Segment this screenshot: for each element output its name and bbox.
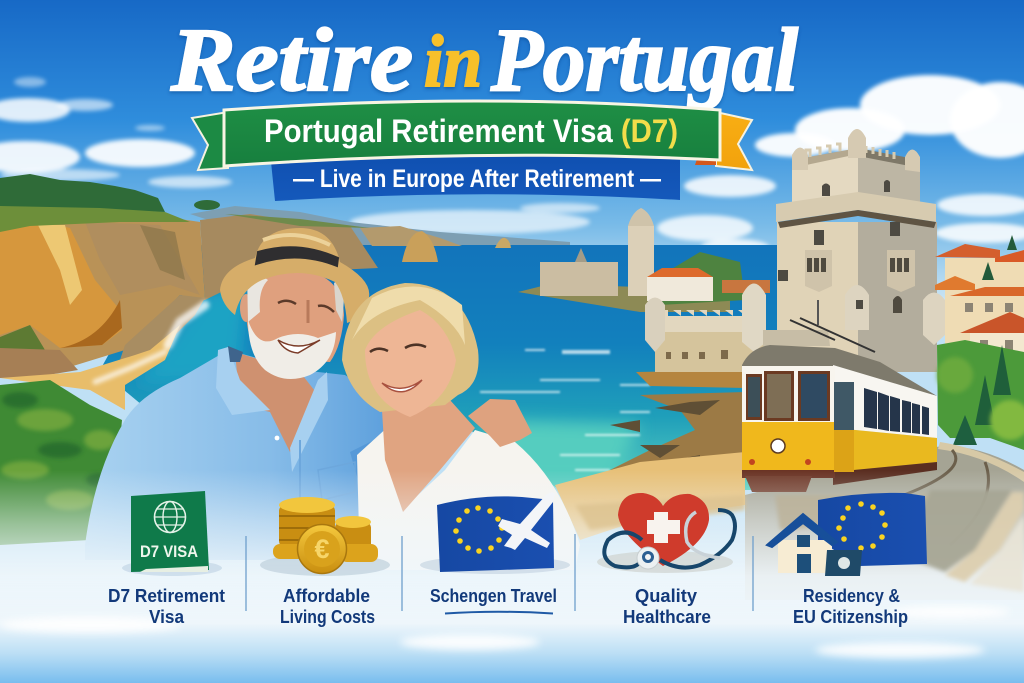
label: Affordable Living Costs: Living Costs [280,606,375,627]
distant hills [190,206,570,250]
icon: coins: € [314,534,330,564]
tram front [742,366,835,470]
tram [742,300,937,492]
tram side [833,365,937,438]
face [246,270,344,362]
title: in [424,21,482,103]
shirt [85,350,392,560]
ribbon tails [192,112,752,170]
chest [382,400,475,512]
upper tower [792,150,858,205]
label: D7 Retirement Visa: D7 Retirement [108,585,225,606]
tower windows and balconies [778,180,900,281]
hair [342,283,479,412]
sky background [0,0,1024,300]
label: Affordable Living Costs: Affordable [283,585,370,606]
Belem tower [645,129,945,372]
blouse [357,425,580,570]
collar [216,347,328,472]
white surf [95,305,205,382]
hat [220,228,369,323]
icon: passport [122,491,222,576]
label: Residency & EU Citizenship: Residency & [803,585,900,606]
icon: house and EU flag [767,493,927,576]
coastal rocks [610,370,745,470]
turquoise shallows [135,285,640,485]
label: Schengen Travel: Schengen Travel [430,585,557,606]
corner turrets [792,129,920,172]
label: Quality Healthcare: Quality [635,585,698,606]
label: Affordable Living Costs [280,585,375,627]
town on right [935,235,1024,358]
banner [192,101,752,201]
face [365,310,456,417]
beach [0,295,205,410]
icon: passport: D7 VISA [140,542,198,561]
icon: EU flag and plane [420,492,570,574]
near cliffs [0,205,205,378]
terrace and battlements [776,192,936,222]
labels [108,585,908,627]
title: Retire [170,11,413,110]
label: Quality Healthcare: Healthcare [623,606,711,627]
icon: coins [260,497,390,576]
banner heading: Portugal Retirement Visa (D7) [264,113,678,149]
man [85,228,392,560]
right trees [937,340,1024,450]
tower body [777,222,858,372]
bushes [0,380,122,545]
label: Residency & EU Citizenship: EU Citizenship [793,606,908,627]
label: D7 Retirement Visa [108,585,225,627]
neck [235,352,318,452]
bottom white fade [0,470,1024,683]
distant cliffs [200,214,511,300]
title [170,11,798,110]
sea waves [480,350,650,470]
bottom wisps [0,606,1010,658]
clouds [0,75,1024,255]
sea [100,245,790,490]
title: Portugal [490,11,798,110]
man's hand [468,399,532,447]
cliff-top vegetation [0,174,220,232]
headland and distant fortress [518,208,770,312]
green ribbon [224,101,720,166]
sand foreground [555,452,745,540]
tram roof [763,330,830,346]
railway road [745,442,1024,600]
label: D7 Retirement Visa: Visa [149,606,185,627]
feature dividers [246,534,753,611]
beard [248,320,336,379]
subtitle: — Live in Europe After Retirement — [293,165,661,193]
blue subtitle ribbon [270,152,680,201]
label: Residency & EU Citizenship [793,585,908,627]
cobbled road reappearing at right [575,490,1024,592]
icon: heart and stethoscope [597,493,735,573]
label: Quality Healthcare [623,585,711,627]
woman [342,283,580,570]
fortress wall [645,284,766,372]
